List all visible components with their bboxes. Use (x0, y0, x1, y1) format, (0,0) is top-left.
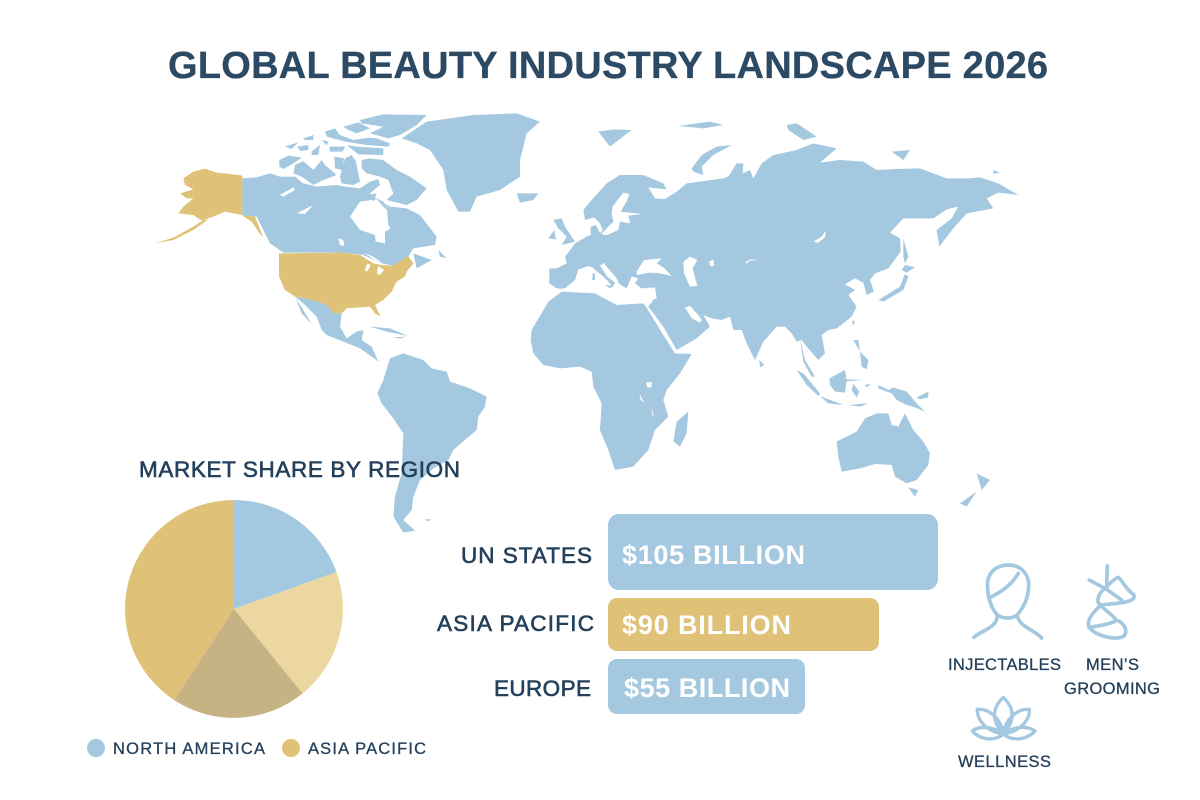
label: Injectables: INJECTABLES (948, 656, 1061, 674)
icon: face (974, 565, 1042, 638)
world map (155, 113, 1018, 533)
Eurasia (549, 143, 1018, 360)
wedge: blue (234, 500, 336, 609)
Contiguous USA (279, 253, 413, 317)
Red Sea (646, 306, 673, 348)
Japan and Sakhalin (878, 238, 915, 302)
icon: lotus (972, 697, 1035, 739)
legend label: North America: NORTH AMERICA (113, 740, 265, 758)
wedge: light gold (234, 572, 343, 694)
legend label: Asia Pacific: ASIA PACIFIC (308, 740, 426, 758)
Arctic archipelagos (598, 122, 1000, 175)
Persian Gulf (685, 306, 702, 323)
label: Men's grooming: MEN’S (1086, 656, 1139, 674)
map: Southeast Asia and Oceania (797, 320, 977, 507)
Madagascar (673, 412, 688, 447)
wedge: gold (125, 500, 234, 700)
Mediterranean Sea (558, 263, 657, 305)
bar value: $105 billion: $105 BILLION (622, 540, 805, 570)
Iceland (517, 193, 538, 203)
Sri Lanka and New Zealand north (759, 360, 990, 490)
legend dot: Asia Pacific (282, 739, 300, 757)
bar: $105 billion (608, 514, 938, 590)
bar label: UN States: UN STATES (461, 543, 592, 568)
bar: $90 billion (608, 598, 879, 651)
Mexico and Central America (295, 297, 378, 362)
map: Eurasia and Africa (531, 122, 1018, 490)
Tasmania and New Zealand south (908, 487, 977, 507)
icon: hair twist (1088, 566, 1134, 638)
Great Lakes (363, 253, 384, 275)
bar value: $90 billion: $90 BILLION (622, 610, 791, 640)
label: Men's grooming: GROOMING (1064, 680, 1160, 698)
label: Wellness: WELLNESS (958, 753, 1051, 771)
Canada (242, 173, 437, 266)
bar value: $55 billion: $55 BILLION (624, 673, 790, 703)
Greenland (402, 113, 540, 212)
wedge: tan (174, 609, 302, 718)
legend (87, 739, 426, 758)
Baikal and lakes (745, 231, 826, 263)
Canadian lakes (280, 187, 344, 246)
trend icons (948, 565, 1160, 771)
South America (377, 353, 487, 533)
Australia (837, 413, 930, 483)
African lakes (639, 382, 653, 416)
Newfoundland and Maritimes (413, 250, 447, 268)
bar: $55 billion (608, 659, 805, 714)
British Isles (548, 218, 575, 245)
Caribbean islands (370, 327, 408, 339)
Arctic Canada islands (279, 114, 427, 212)
legend dot: North America (87, 739, 105, 757)
Black Sea (637, 258, 672, 276)
Italy and Mediterranean islands (592, 266, 615, 288)
title: GLOBAL BEAUTY INDUSTRY LANDSCAPE 2026 (168, 45, 1048, 87)
Alaska (155, 169, 263, 243)
label: Men's grooming (1064, 656, 1160, 698)
bar label: Asia Pacific: ASIA PACIFIC (437, 611, 594, 636)
New Guinea (878, 385, 928, 412)
Hudson Bay (350, 199, 391, 243)
Maritime Southeast Asia (797, 320, 872, 407)
bar chart (437, 514, 938, 714)
pie heading: MARKET SHARE BY REGION (139, 457, 460, 482)
pie chart (125, 500, 343, 718)
map: North America (155, 113, 540, 362)
Baltic Sea (602, 193, 642, 235)
bar label: Europe: EUROPE (494, 676, 591, 701)
Caspian and Aral seas (683, 257, 714, 287)
Africa (531, 292, 692, 470)
